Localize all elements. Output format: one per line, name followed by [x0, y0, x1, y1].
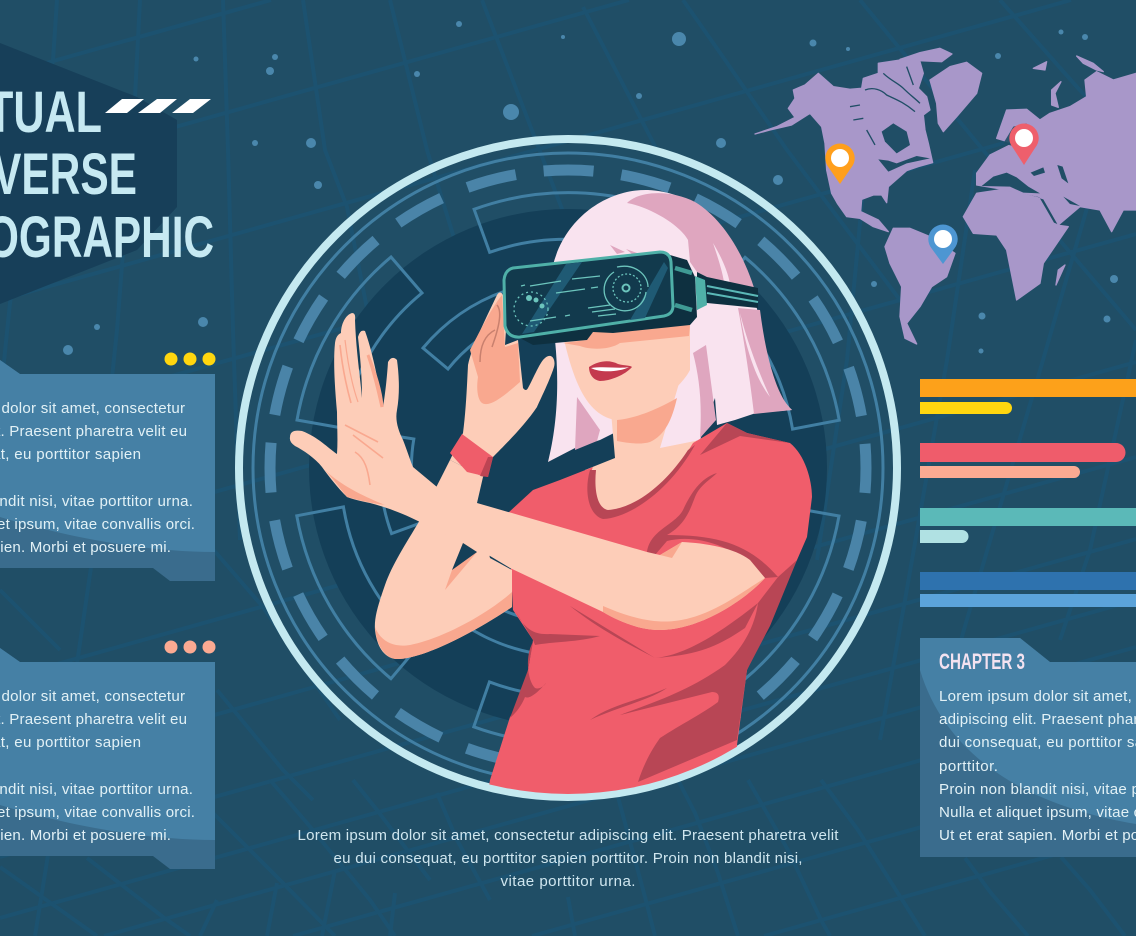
chapter 2 dots: [164, 640, 216, 654]
outer light ring: [239, 139, 897, 797]
headset side vents: [675, 268, 692, 310]
lips: [589, 361, 632, 381]
bottom caption: Lorem ipsum dolor sit amet, consectetur adipiscing elit. Praesent pharetra velit: [298, 827, 839, 844]
chapter 3 text: [939, 688, 1136, 844]
chapter 1 text: [0, 400, 195, 556]
face and neck: [564, 325, 698, 510]
chapter 1 dots: [164, 352, 216, 366]
hair: [548, 190, 792, 462]
title banner background: [0, 43, 177, 304]
bottom caption: eu dui consequat, eu porttitor sapien porttitor. Proin non blandit nisi,: [334, 850, 802, 867]
screen graphics: [514, 266, 648, 326]
headset screen: [504, 252, 673, 337]
pin: blue: [928, 225, 958, 264]
headset body: [520, 255, 697, 345]
panel: chapter 1: [0, 352, 216, 581]
main arm and open hand: [290, 313, 765, 630]
dark centre disc: [309, 209, 827, 727]
title white stripes: [105, 99, 211, 113]
inner segment outlines: [342, 291, 555, 682]
shirt: [485, 423, 812, 810]
bar chart: [920, 379, 1136, 607]
panel: chapter 3: [920, 638, 1136, 857]
bottom caption: vitae porttitor urna.: [500, 873, 636, 890]
chapter 3 text: porttitor.: [939, 758, 998, 775]
title banner: [0, 43, 214, 304]
headset strap: [697, 272, 758, 310]
map landmasses: [755, 48, 1136, 344]
woman in VR headset: [290, 190, 812, 810]
background star dots: [63, 21, 1118, 355]
screen reflections: [522, 262, 668, 334]
map water details: [850, 67, 1080, 224]
pin: orange: [825, 144, 855, 184]
bottom caption: [298, 827, 839, 890]
outer segment outlines: [250, 128, 886, 808]
thin ring: [253, 153, 883, 783]
hud circle: [239, 128, 897, 808]
screen dots: [526, 295, 544, 308]
world map: [755, 48, 1136, 344]
segmented ring: [270, 170, 866, 766]
VR headset: [504, 252, 758, 345]
panel: chapter 2: [0, 640, 216, 869]
chapter 3 heading: CHAPTER 3: [939, 649, 1025, 674]
folded forearm and raised hand: [375, 292, 555, 659]
chapter 2 text: [0, 688, 195, 844]
pin: red: [1009, 124, 1039, 165]
wristband: [450, 434, 493, 477]
